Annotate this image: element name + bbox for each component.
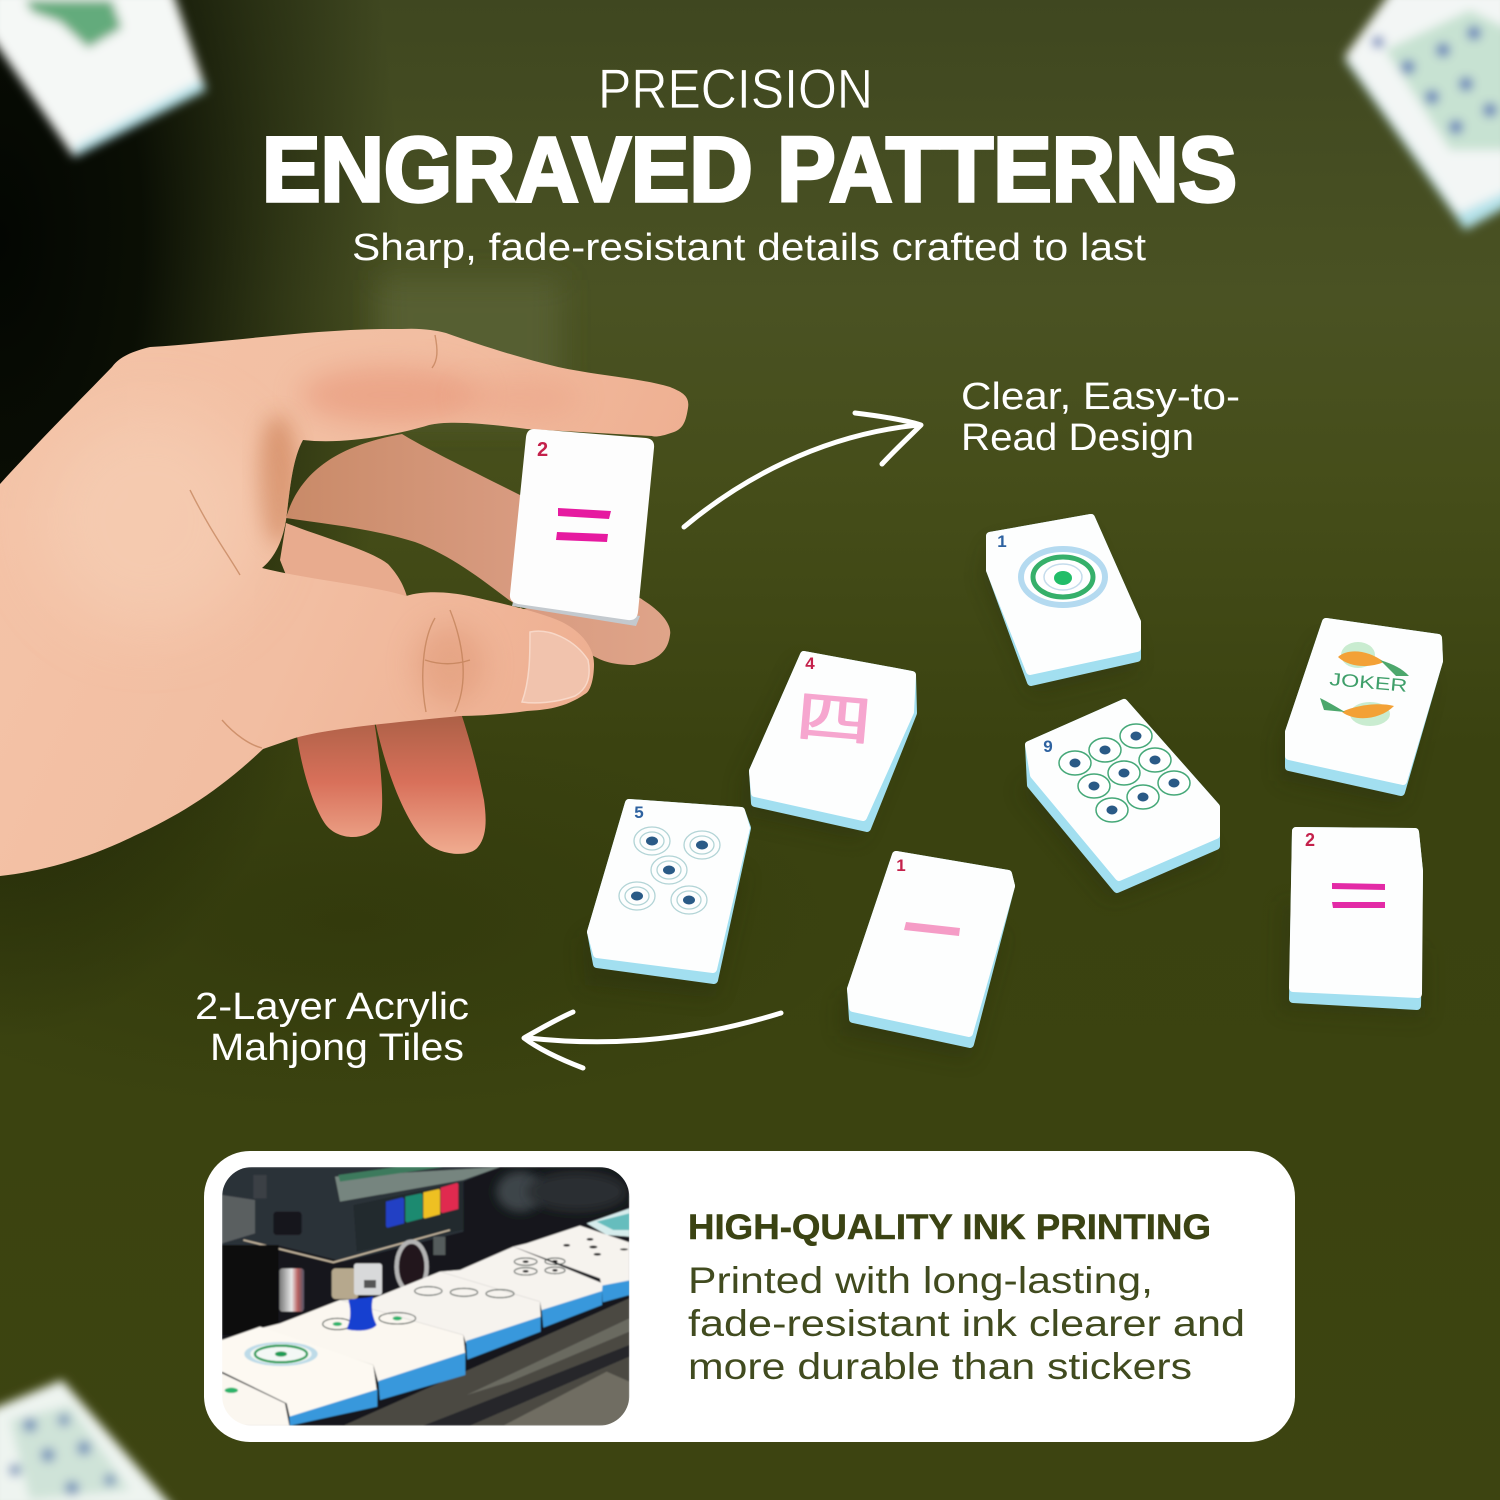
panel: ink printing bbox=[204, 1151, 1295, 1442]
tile: joker bbox=[1280, 622, 1439, 805]
tile: one character bbox=[840, 855, 1011, 1060]
panel body text: fade-resistant ink clearer and bbox=[688, 1303, 1245, 1344]
palm, index finger and thumb bbox=[0, 329, 688, 876]
fish and joker lettering bbox=[1320, 642, 1409, 726]
fish and joker lettering: JOKER bbox=[1329, 669, 1408, 696]
tile: four character bbox=[740, 654, 913, 840]
label: acrylic tiles bbox=[195, 986, 469, 1069]
lower fingers bbox=[295, 710, 486, 854]
tile: five circles bbox=[582, 803, 747, 998]
panel body text: Printed with long-lasting, bbox=[688, 1260, 1153, 1301]
title: ENGRAVED PATTERNS bbox=[262, 119, 1237, 221]
hand shading bbox=[40, 367, 580, 705]
title: PRECISION bbox=[598, 57, 873, 120]
blurred tile: bottom left bbox=[0, 1380, 175, 1500]
tile: five circles: 5 bbox=[634, 803, 644, 822]
title: Sharp, fade-resistant details crafted to last bbox=[352, 227, 1146, 269]
blurred tile: top left bbox=[0, 0, 206, 157]
tile: nine circles: 9 bbox=[1043, 737, 1053, 756]
panel body text bbox=[688, 1260, 1245, 1387]
middle finger behind tile bbox=[286, 434, 670, 665]
label: clear design: Clear, Easy-to- bbox=[961, 376, 1240, 418]
panel body text: more durable than stickers bbox=[688, 1346, 1192, 1387]
tile in hand bbox=[510, 429, 654, 626]
label: acrylic tiles: Mahjong Tiles bbox=[210, 1027, 464, 1069]
knuckle wrinkles bbox=[190, 335, 470, 748]
title bbox=[262, 57, 1237, 269]
tile: one character: 1 bbox=[896, 856, 906, 875]
label: clear design bbox=[961, 376, 1240, 459]
tile: two character: 2 bbox=[1305, 830, 1315, 850]
photo: printing machine bbox=[222, 1167, 629, 1426]
arrow to clear design label bbox=[684, 413, 921, 527]
tile: two character bbox=[1280, 830, 1425, 1018]
arrow to acrylic label bbox=[524, 1012, 781, 1068]
tile in hand: 2 bbox=[537, 439, 548, 461]
tile: one circle: 1 bbox=[997, 532, 1007, 551]
ring finger bbox=[280, 523, 408, 610]
hand holding tile bbox=[0, 329, 688, 876]
thumbnail bbox=[522, 631, 589, 703]
panel heading: HIGH-QUALITY INK PRINTING bbox=[688, 1208, 1211, 1247]
blurred tile: top right bbox=[1345, 0, 1500, 230]
tile: one circle bbox=[982, 518, 1137, 694]
label: acrylic tiles: 2-Layer Acrylic bbox=[195, 986, 469, 1028]
label: clear design: Read Design bbox=[961, 417, 1194, 459]
tile: four character: 四 bbox=[794, 686, 874, 754]
tile: nine circles bbox=[1018, 703, 1216, 900]
tile: four character: 4 bbox=[805, 654, 815, 673]
